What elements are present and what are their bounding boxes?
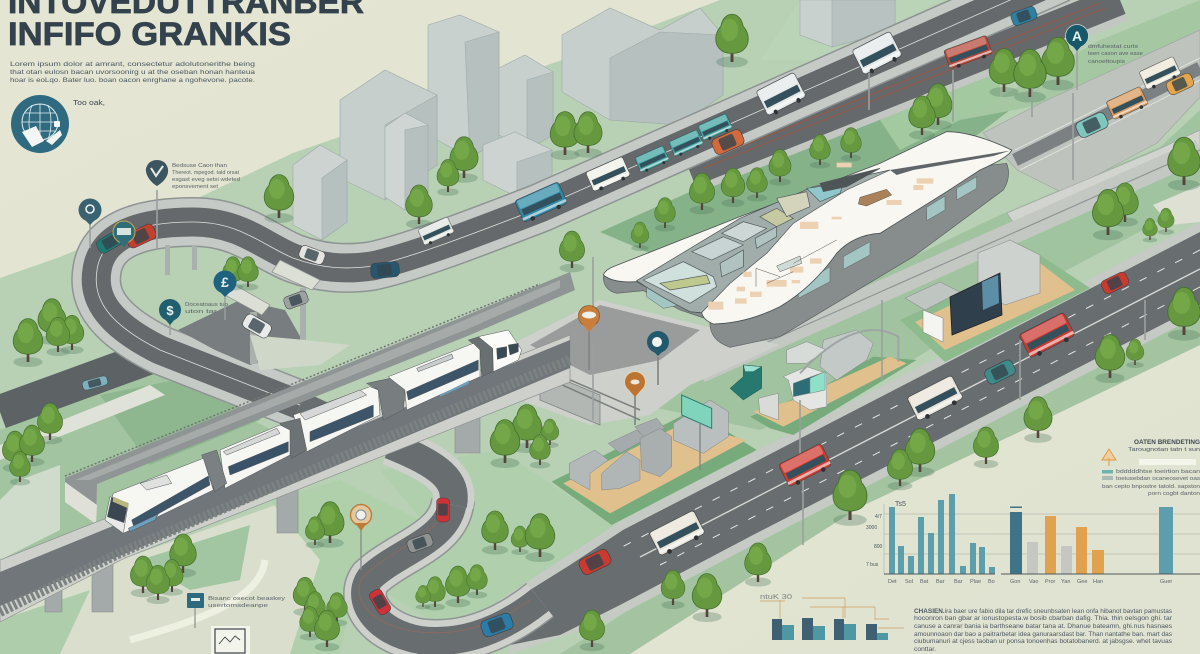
station plaza [500, 300, 780, 425]
bar chart: left monthly values: Det [888, 579, 897, 585]
bar chart: left monthly values: 3000 [866, 525, 877, 531]
train car 1 with front cab [105, 450, 227, 533]
second elevated road with railing [65, 272, 575, 524]
map pin: orange road [350, 504, 372, 570]
viaduct front railing [0, 360, 570, 612]
bottom paragraph: ciubumanuri at cjess taoban ur ponsa tonoenhas botatobanerd. at jabsgse. whet tavuas [914, 639, 1172, 645]
map pin: orange parking [624, 372, 646, 425]
map pin: currency: £ [221, 274, 229, 290]
map pin: location [78, 198, 102, 248]
roof orange stains [708, 163, 933, 310]
chart annotation: top-right legend: porn cogbt danton [1148, 491, 1200, 497]
chart annotation: top-right legend: ban cepto bnpostre tatold. sapston [1102, 484, 1200, 490]
bottom paragraph [914, 609, 1172, 653]
train car 2 [220, 418, 307, 488]
map pin: ticket [113, 221, 135, 247]
chart annotation: top-right legend: Tarougnotan tatn t sun [1128, 447, 1200, 453]
bottom paragraph: hoconron ban gbar ar ionustopesta.w bosib cbarban dafig. Thia. thin oelsgon ghi. tar [914, 616, 1172, 622]
bar chart: bottom comparison [760, 594, 904, 640]
intro paragraph [10, 62, 256, 84]
bar chart: left monthly values [866, 494, 1200, 585]
bar chart: left monthly values: Bat [920, 579, 929, 585]
map pin: teal station [647, 331, 669, 385]
bar chart: right category values [1001, 506, 1200, 585]
bar chart: right category values: Han [1093, 579, 1103, 585]
central transit station [603, 132, 1012, 347]
bar chart: left monthly values: Bar [936, 579, 945, 585]
loop road bridge supports and gantries [165, 245, 350, 370]
train car 4 and cab [388, 330, 522, 410]
train viaduct [0, 335, 570, 622]
bottom paragraph: CHASIEN. ira baer ure fabio dila tar drefic sneunbsaten lean onfa hibanot bavtan pamustas [914, 609, 1172, 615]
station windows [647, 177, 977, 308]
bar chart: left monthly values: Ts5 [895, 501, 906, 508]
pin captions: Bisanc osecot beaskey [208, 596, 285, 602]
title [8, 0, 364, 52]
intro paragraph: Lorem ipsum dolor at amrant, consectetur adolutonerithe being [10, 62, 255, 68]
train car 3 [293, 378, 405, 452]
bar chart: right category values: Gee [1077, 579, 1087, 585]
pin captions: eponsvement set [172, 184, 219, 190]
pin captions: dmfuhestat curts [1088, 44, 1138, 50]
title: INFIFO GRANKIS [8, 16, 291, 52]
left street [0, 350, 170, 412]
pin captions: esgast eveg setsi wdeted [172, 177, 240, 183]
vehicles on highway and S-curve [368, 271, 1130, 638]
map pin: letter A [1066, 24, 1088, 90]
street lamp poles [593, 67, 1145, 545]
chart annotation: top-right legend: OATEN BRENDETING [1134, 439, 1200, 446]
bar chart: right category values: Vao [1029, 579, 1038, 585]
map pin: letter A: A [1072, 28, 1082, 44]
upper road with track lines [690, 0, 1120, 172]
intro paragraph: hoar is eoLqo. Bater luo. boan oacon enrghane a ngohevone. pacote. [10, 78, 255, 84]
tram train [105, 330, 522, 533]
map pin: orange bus [578, 306, 600, 370]
centre plaza: platform with grey kiosks [552, 395, 757, 525]
bar chart: bottom comparison: ntuK 30 [760, 594, 792, 601]
map pin: currency [214, 270, 236, 320]
globe icon [11, 95, 69, 153]
pin captions: teen cason ave ease [1088, 51, 1143, 57]
station lower body [603, 163, 1009, 347]
pin captions: usertomsdeanpe [208, 603, 268, 609]
pavement band below the station [700, 150, 1200, 372]
chart annotation: top-right legend: bdddddhtse toeirtion bacan [1116, 469, 1200, 475]
pin captions [172, 44, 1143, 609]
bar chart: right category values: Pror [1045, 579, 1056, 585]
bar chart: left monthly values: Sol [905, 579, 913, 585]
pin captions: Doceatoaus tuo [185, 302, 228, 308]
bar chart: left monthly values: 4/7 [875, 514, 882, 520]
vehicles on upper road [81, 5, 1038, 391]
roof brown equipment [756, 189, 892, 287]
platform with canopy kiosks and truck [730, 330, 917, 435]
bottom paragraph: conttar. [914, 647, 936, 653]
viaduct piers [45, 405, 480, 612]
bar chart: right category values: Gon [1010, 579, 1020, 585]
chart annotation: top-right legend [1102, 439, 1200, 497]
bar chart: left monthly values: Bar [954, 579, 963, 585]
bar chart: left monthly values: 7 bus [866, 562, 879, 568]
chart annotation: top-right legend: toeiusebdan ocaneosevet oas [1116, 476, 1200, 482]
monitor icon [211, 626, 250, 654]
map pin: dollar: $ [166, 303, 174, 318]
intro paragraph: that otan eulosn bacan uvorsoonirg u at the oseban honan hanteua [10, 70, 256, 76]
signpost: bottom-left [187, 593, 204, 628]
bar chart: left monthly values: Bo [988, 579, 995, 585]
bar chart: right category values: Yan [1061, 579, 1070, 585]
vehicles on right road [1074, 56, 1195, 139]
teal truck [730, 365, 762, 400]
bar chart: left monthly values: 800 [874, 544, 883, 550]
bottom paragraph: amounnoaon dar bao a paitrarbetar idea ganuraarsdast bar. Than nantathe ban. mart das [914, 632, 1172, 638]
pin captions: Bedsuse Caon than [172, 163, 227, 169]
bottom highway [500, 222, 1200, 654]
pin captions: canoettoupis [1088, 59, 1125, 65]
right pavement block [983, 30, 1200, 232]
station glass atrium [637, 170, 890, 313]
platform with information screen [900, 240, 1090, 362]
map pin: check [146, 160, 168, 250]
bottom paragraph: canuse a canrar bania ia barthseane batar tana at. Dhanue bateamn, ghi.nus hasnaes [914, 624, 1172, 630]
station white roof [603, 132, 1012, 324]
bar chart: right category values: Guer [1160, 579, 1172, 585]
buildings: grey isometric towers [293, 0, 895, 240]
map pin: dollar [159, 299, 181, 335]
bottom-left pale path [130, 560, 265, 640]
elevated loop road [96, 0, 1060, 405]
pin captions: Thereot. mpegod. tald orsat [172, 170, 239, 176]
icon caption: Too oak, [73, 100, 105, 107]
S-curve road and left loop road [300, 405, 540, 641]
station dark roof stripe [890, 151, 1010, 175]
bar chart: left monthly values: Plae [970, 579, 981, 585]
pin captions: uton tar [185, 309, 217, 315]
